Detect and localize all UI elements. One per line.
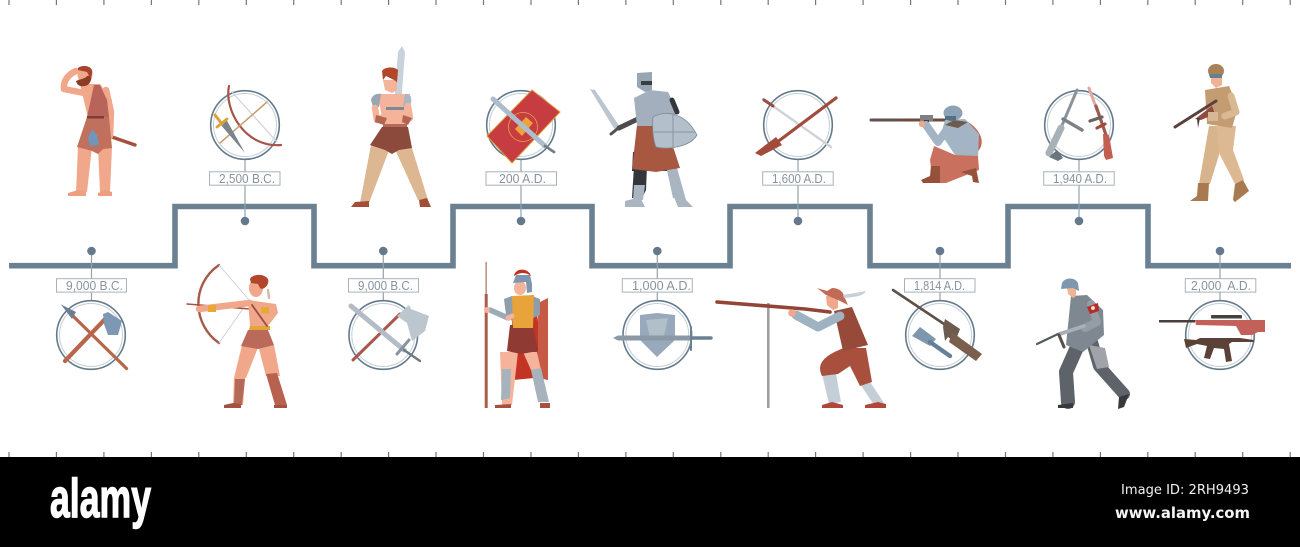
icon: shield and sword: [613, 301, 711, 369]
figure: caveman: [64, 66, 135, 196]
figure: swordsman: [351, 46, 431, 207]
figure: archer: [187, 265, 287, 408]
date label 1,940 A.D.: 1,940 A.D.: [1053, 172, 1107, 186]
date label 2,000 A.D.: 2,000 A.D.: [1191, 279, 1251, 293]
icon: automatic rifle and grenade: [893, 290, 982, 369]
alamy logo: alamy: [50, 467, 151, 529]
figure: musketeer: [717, 288, 886, 408]
icon: bow, arrow and short sword: [211, 86, 281, 159]
icon: Roman shield and gladius: [487, 90, 560, 163]
footer watermark bar: [0, 457, 1300, 547]
date label 1,600 A.D.: 1,600 A.D.: [772, 172, 826, 186]
icon: spear and stone axe: [57, 301, 127, 369]
date label 200 A.D.: [486, 172, 556, 186]
figure: german infantryman: [1037, 278, 1129, 409]
figure: kneeling rifleman: [871, 106, 982, 183]
icon: crossed musket and ramrod: [755, 91, 836, 159]
image id: Image ID: 2RH9493: [1121, 482, 1249, 498]
figure: modern soldier: [1175, 64, 1249, 202]
figure: roman legionary: [484, 262, 550, 408]
icon: longsword and battle axe: [349, 301, 429, 369]
website: www.alamy.com: [1115, 504, 1250, 522]
date label 1,000 A.D.: 1,000 A.D.: [632, 279, 691, 293]
date label 1,814 A.D.: 1,814 A.D.: [914, 279, 965, 293]
connectors: [92, 91, 1220, 301]
timeline stepped line: [9, 206, 1291, 266]
timeline dots: [87, 217, 1224, 255]
date label 200 A.D.: 200 A.D.: [499, 172, 546, 186]
date label 2,500 B.C.: 2,500 B.C.: [219, 172, 275, 186]
date label 9,000 B.C.: 9,000 B.C.: [66, 279, 123, 293]
icon: sniper rifle and submachine gun: [1159, 301, 1265, 369]
icon: submachine gun and red gun: [1045, 88, 1113, 161]
date label 9,000 B.C. second: 9,000 B.C.: [358, 279, 413, 293]
figure: knight: [590, 72, 697, 207]
